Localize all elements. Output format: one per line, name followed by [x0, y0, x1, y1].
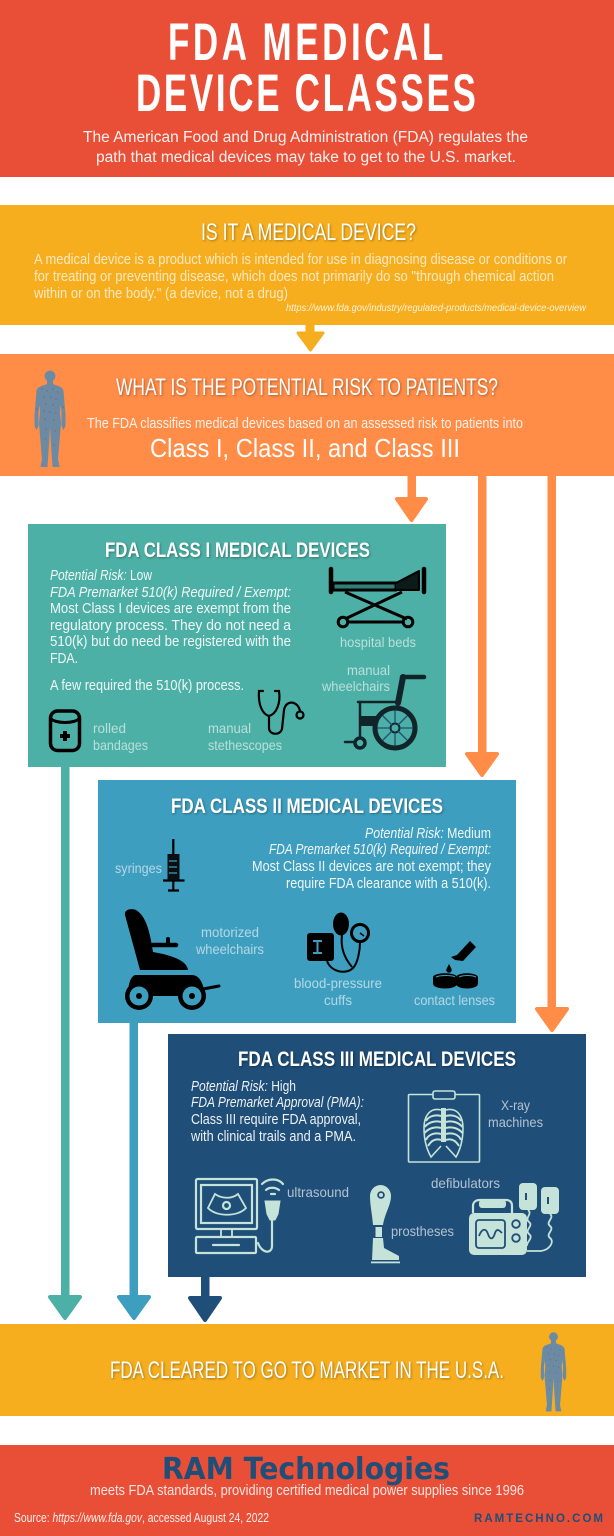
- icon: motorized wheelchair: [125, 909, 219, 1010]
- label: motorized wheelchairs: motorized: [201, 924, 259, 940]
- panel: potential risk: [0, 354, 614, 476]
- class I description: 510(k) but do need be registered with the: [50, 634, 291, 650]
- class I description: A few required the 510(k) process.: [50, 678, 244, 694]
- arrow: class I to market: [50, 767, 80, 1318]
- icon: ultrasound machine: [196, 1179, 283, 1253]
- label: motorized wheelchairs: wheelchairs: [195, 941, 264, 957]
- risk description: The FDA classifies medical devices based on an assessed risk to patients into: [87, 416, 523, 432]
- class III description: with clinical trails and a PMA.: [190, 1129, 356, 1145]
- icon: x-ray: [408, 1091, 480, 1162]
- class III description: [190, 1079, 364, 1145]
- class II description: [252, 826, 492, 892]
- panel: class III: [168, 1034, 586, 1277]
- label: x-ray machines: [488, 1097, 543, 1130]
- class I description: Potential Risk: Low: [50, 568, 152, 584]
- website: RAMTECHNO.COM: [474, 1513, 603, 1525]
- class I description: FDA Premarket 510(k) Required / Exempt:: [50, 585, 291, 601]
- panel: class I: [28, 524, 446, 767]
- label: manual stethescopes: manual: [208, 720, 251, 736]
- label: manual stethescopes: stethescopes: [208, 737, 282, 753]
- label: prostheses: prostheses: [391, 1223, 454, 1239]
- arrow: class II to market: [119, 1023, 149, 1318]
- icon: defibrillator: [469, 1183, 559, 1255]
- arrow: orange to class II: [467, 476, 497, 775]
- icon: bandage roll: [50, 711, 80, 750]
- heading: is it a medical device: IS IT A MEDICAL DEVICE?: [201, 219, 416, 246]
- label: rolled bandages: [93, 720, 148, 753]
- class III description: Potential Risk: High: [191, 1079, 296, 1095]
- label: motorized wheelchairs: [195, 924, 264, 957]
- label: blood-pressure cuffs: cuffs: [324, 992, 352, 1008]
- label: rolled bandages: rolled: [93, 720, 126, 736]
- definition text: [33, 252, 567, 302]
- label: defibulators: defibulators: [431, 1175, 500, 1191]
- label: x-ray machines: X-ray: [501, 1097, 530, 1113]
- icon: prosthesis: [370, 1185, 400, 1263]
- header panel: [0, 0, 614, 177]
- panel: class II: [98, 780, 516, 1023]
- icon: human body: [34, 371, 66, 467]
- class II description: Potential Risk: Medium: [365, 826, 491, 842]
- header intro text: [83, 129, 528, 166]
- panel: is it a medical device: [0, 205, 614, 325]
- arrow: orange to class I: [397, 476, 426, 520]
- label: manual wheelchairs: manual: [347, 662, 390, 678]
- label: x-ray machines: machines: [488, 1114, 543, 1130]
- label: syringes: syringes: [115, 860, 162, 876]
- heading: class II: FDA CLASS II MEDICAL DEVICES: [171, 794, 443, 818]
- label: contact lenses: contact lenses: [414, 992, 495, 1008]
- class II description: require FDA clearance with a 510(k).: [286, 876, 491, 892]
- arrow: class III to market: [190, 1277, 220, 1320]
- class III description: FDA Premarket Approval (PMA):: [191, 1095, 364, 1111]
- class I description: Most Class I devices are exempt from the: [50, 601, 291, 617]
- panel: cleared to market: [0, 1324, 614, 1416]
- icon: stethoscope: [259, 691, 304, 734]
- label: manual stethescopes: [208, 720, 282, 753]
- icon: syringe: [163, 839, 184, 890]
- definition text: for treating or preventing disease, which does not primarily do so "through chemical action: [34, 269, 554, 285]
- source: Source: https://www.fda.gov, accessed August 24, 2022: [14, 1511, 269, 1525]
- heading: class I: FDA CLASS I MEDICAL DEVICES: [105, 538, 370, 562]
- icon: contact lenses: [433, 941, 478, 988]
- arrow: orange to class III: [537, 476, 567, 1030]
- class III description: Class III require FDA approval,: [191, 1112, 361, 1128]
- arrow: yellow to orange: [298, 325, 323, 350]
- class I description: FDA.: [50, 651, 78, 667]
- header intro text: path that medical devices may take to get to the U.S. market.: [96, 149, 516, 166]
- class I description: [50, 568, 292, 694]
- class I description: regulatory process. They do not need a: [50, 618, 292, 634]
- company logo: RAM Technologies: [162, 1452, 450, 1487]
- icon: human body: [541, 1332, 566, 1411]
- class II description: Most Class II devices are not exempt; they: [252, 859, 492, 875]
- title: [136, 12, 476, 123]
- icon: blood pressure cuff: [307, 912, 368, 972]
- label: manual wheelchairs: [321, 662, 390, 694]
- title: DEVICE CLASSES: [136, 63, 476, 123]
- panel: footer: [0, 1445, 614, 1536]
- definition text: within or on the body." (a device, not a drug): [33, 286, 288, 302]
- label: ultrasound: ultrasound: [287, 1184, 349, 1200]
- label: blood-pressure cuffs: [294, 975, 382, 1008]
- class II description: FDA Premarket 510(k) Required / Exempt:: [269, 842, 491, 858]
- icon: hospital bed: [331, 569, 424, 627]
- title: FDA MEDICAL: [168, 12, 443, 72]
- class list: Class I, Class II, and Class III: [150, 433, 460, 463]
- label: blood-pressure cuffs: blood-pressure: [294, 975, 382, 991]
- icon: wheelchair: [345, 677, 424, 748]
- heading: class III: FDA CLASS III MEDICAL DEVICES: [238, 1047, 516, 1071]
- header intro text: The American Food and Drug Administration (FDA) regulates the: [83, 129, 528, 146]
- company tagline: meets FDA standards, providing certified medical power supplies since 1996: [90, 1483, 524, 1499]
- label: manual wheelchairs: wheelchairs: [321, 678, 390, 694]
- label: rolled bandages: bandages: [93, 737, 148, 753]
- label: hospital beds: hospital beds: [340, 634, 416, 650]
